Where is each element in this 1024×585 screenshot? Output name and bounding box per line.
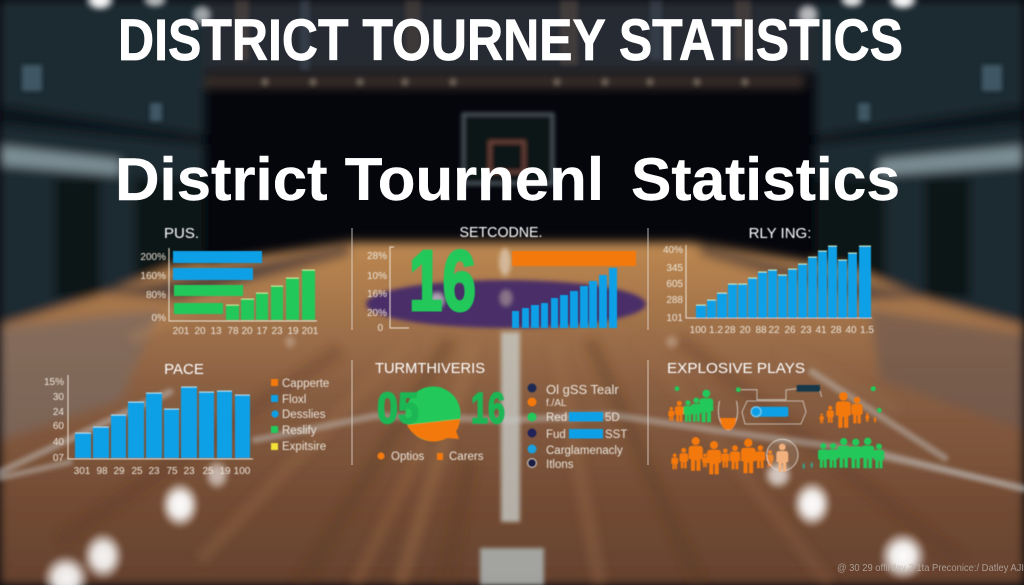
subtitle: Statistics [631, 146, 900, 213]
axis labels: 160% [140, 271, 166, 282]
axis labels: 201 [302, 326, 319, 337]
axis labels: 78 [227, 326, 239, 337]
axis labels: 100 [690, 325, 707, 336]
heading: EXPLOSIVE PLAYS: EXPLOSIVE PLAYS [667, 360, 805, 377]
axis labels: 22 [768, 325, 780, 336]
axis labels: 15% [44, 377, 64, 388]
team legend [528, 382, 627, 471]
axis labels: 80% [146, 290, 166, 301]
axis labels: 20 [194, 326, 206, 337]
axis labels [140, 252, 319, 337]
team legend: Fud [546, 429, 566, 441]
axis labels: 19 [287, 326, 299, 337]
people group: bottom green [802, 438, 884, 469]
axis labels: 88 [755, 325, 767, 336]
axis labels: 28% [367, 251, 387, 262]
axis labels: 40 [845, 325, 857, 336]
axis labels: 16% [367, 289, 387, 300]
axis labels: 25 [131, 466, 143, 477]
axis labels: 23 [148, 466, 160, 477]
axis labels: 1.2 [709, 325, 723, 336]
axis labels: 23 [183, 466, 195, 477]
axis labels: 19 [219, 466, 231, 477]
panel: TURNOVERS chart [375, 360, 627, 471]
axis labels: 60 [53, 421, 64, 432]
panel: SETCODNE. chart [367, 224, 636, 334]
axis labels: 288 [666, 295, 683, 306]
axis labels: 29 [113, 466, 125, 477]
axis labels: 201 [173, 326, 190, 337]
axis labels: 41 [815, 325, 827, 336]
separators [352, 228, 648, 465]
number 16: 16 [471, 384, 505, 433]
panel: EXPLOSIVE PLAYS [667, 360, 884, 474]
team legend: Itlons [546, 459, 574, 471]
axis labels: 28 [724, 325, 736, 336]
team legend: f./AL [546, 398, 567, 409]
legend [271, 378, 329, 453]
subtitle [115, 146, 900, 213]
axis labels: 301 [74, 466, 91, 477]
ceiling streaks [235, 0, 751, 70]
heading: RLY ING:: RLY ING: [749, 225, 811, 242]
axis labels: 25 [202, 466, 214, 477]
pie legend: Carers [449, 451, 484, 463]
axis labels: 40% [663, 245, 683, 256]
axis labels: 28 [830, 325, 842, 336]
heading: PACE: PACE [164, 361, 204, 378]
legend: Desslies [282, 409, 326, 421]
team legend: SST [605, 429, 627, 441]
title: DISTRICT TOURNEY STATISTICS [118, 8, 903, 73]
axis labels: 0% [152, 313, 166, 324]
axes [686, 245, 872, 318]
pie legend: Optios [391, 451, 424, 463]
people group: top right [820, 392, 876, 428]
axis labels: 40 [53, 437, 64, 448]
axis labels: 75 [166, 466, 178, 477]
court lines [0, 372, 1024, 490]
blue rising bars [512, 268, 617, 328]
wood plank streaks [60, 290, 960, 585]
axis labels: 23 [800, 325, 812, 336]
axis labels: 605 [666, 279, 683, 290]
number 05: 05 [377, 384, 419, 433]
axes [169, 248, 317, 321]
flask and device diagram [718, 385, 822, 430]
team legend: Ol gSS Tealr [546, 382, 619, 397]
horizontal and vertical bars [173, 251, 315, 320]
axis labels: 20 [241, 326, 253, 337]
people group: top left [668, 390, 713, 422]
axis labels: 10% [367, 271, 387, 282]
blue bars [696, 246, 871, 318]
axis labels: 100 [234, 466, 251, 477]
axis labels: 20 [739, 325, 751, 336]
team legend: Red [546, 412, 567, 424]
axis labels: 23 [271, 326, 283, 337]
axis labels: 200% [140, 252, 166, 263]
axis labels [44, 377, 251, 477]
legend: Expitsire [282, 441, 326, 453]
axis labels: 101 [666, 313, 683, 324]
legend: Floxl [282, 394, 306, 406]
legend: Capperte [282, 378, 329, 390]
axis labels: 20% [367, 308, 387, 319]
axis labels: 24 [53, 407, 64, 418]
axis labels: 07 [53, 453, 64, 464]
axis labels: 98 [96, 466, 108, 477]
heading: PUS.: PUS. [164, 225, 199, 242]
heading: TURMTHIVERIS: TURMTHIVERIS [375, 360, 485, 377]
axis labels: 0 [377, 323, 383, 334]
people group: bottom orange [671, 437, 774, 474]
axis labels: 30 [53, 392, 64, 403]
team legend: Carglamenacly [546, 445, 623, 457]
heading: SETCODNE.: SETCODNE. [460, 224, 542, 241]
axis bracket [390, 247, 409, 328]
pie speech bubble [406, 386, 460, 442]
big number 16: 16 [409, 234, 476, 329]
axis labels: 1.5 [860, 325, 874, 336]
blue bars [75, 387, 250, 458]
axis labels: 345 [666, 263, 683, 274]
axes [68, 375, 253, 459]
legend: Reslify [282, 425, 317, 437]
panel: PACE chart [44, 361, 329, 477]
panel: PUS. chart [140, 225, 319, 337]
axis labels [367, 251, 387, 334]
panel: RLY ING chart [663, 225, 874, 336]
subtitle: District Tournenl [115, 146, 604, 213]
accent dots [675, 386, 882, 413]
team legend: 5D [605, 412, 620, 424]
pie legend [377, 451, 484, 463]
axis labels: 17 [256, 326, 268, 337]
highlighted person in circle [767, 439, 798, 472]
axis labels: 26 [784, 325, 796, 336]
orange bar [512, 251, 636, 266]
axis labels [663, 245, 874, 336]
axis labels: 13 [210, 326, 222, 337]
